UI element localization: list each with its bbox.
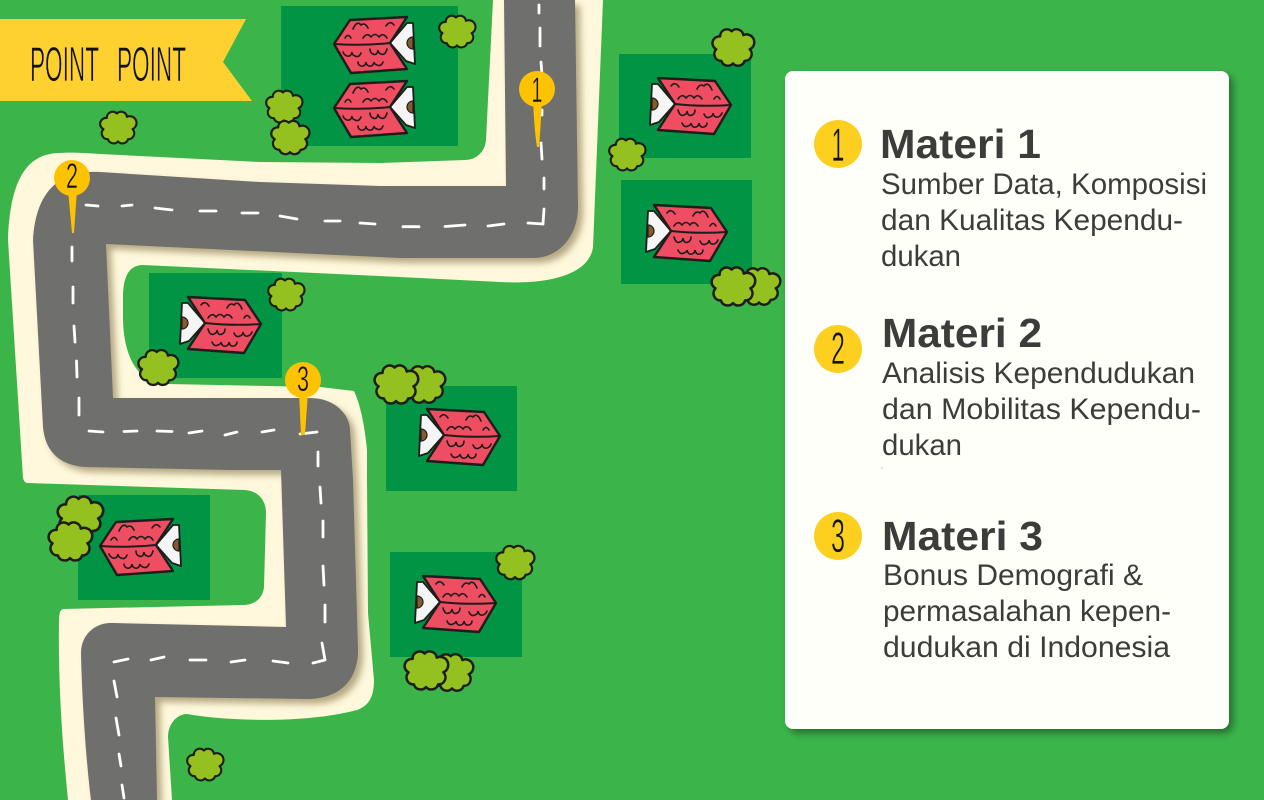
item 2: dan Mobilitas Kependu- <box>882 393 1201 426</box>
road verge: cream shoulder <box>8 0 603 800</box>
item 3 <box>814 509 1171 664</box>
bush <box>405 651 448 689</box>
title ribbon: POINT <box>30 38 99 92</box>
bush <box>58 497 103 536</box>
map pin 1 <box>519 71 555 147</box>
bush <box>403 366 445 403</box>
road centre dashes <box>72 5 544 798</box>
house 1 <box>334 17 415 73</box>
bush <box>712 29 754 66</box>
bush <box>738 268 780 305</box>
house 8 <box>100 519 181 575</box>
item 2: Analisis Kependudukan <box>882 357 1195 390</box>
bush <box>496 546 534 579</box>
item 3: Materi 3 <box>882 513 1043 559</box>
house 6 <box>419 409 500 465</box>
bush <box>431 654 473 691</box>
title ribbon: POINT <box>117 38 186 92</box>
item 2 <box>814 310 1201 468</box>
map pin 2: 2 <box>66 157 78 196</box>
item 3: 3 <box>831 509 845 562</box>
panel: materi list <box>785 71 1233 733</box>
house 7 <box>415 576 496 632</box>
item 3: Bonus Demografi & <box>883 559 1143 592</box>
house 4 <box>646 205 727 261</box>
bush <box>712 267 755 305</box>
title ribbon <box>0 19 252 101</box>
house 5 <box>180 297 261 353</box>
bush <box>49 522 92 560</box>
bush <box>609 139 646 170</box>
item 2: Materi 2 <box>882 310 1042 356</box>
bush <box>439 16 476 47</box>
house plots <box>78 6 752 657</box>
house 2 <box>334 81 415 137</box>
item 1: dan Kualitas Kependu- <box>881 204 1183 237</box>
item 1: Sumber Data, Komposisi <box>881 168 1207 201</box>
item 1 <box>814 118 1207 273</box>
road shadow <box>38 5 583 800</box>
bush <box>187 749 224 780</box>
map pin 3 <box>285 360 321 435</box>
house 3 <box>650 78 731 134</box>
map pin 3: 3 <box>297 360 309 399</box>
bush <box>100 112 137 143</box>
bush <box>375 365 418 403</box>
map pin 2 <box>54 157 90 233</box>
item 2: dukan <box>882 429 962 462</box>
winding road <box>33 0 578 800</box>
item 2: 2 <box>831 323 845 374</box>
item 1: 1 <box>832 118 844 171</box>
item 3: dudukan di Indonesia <box>883 631 1170 664</box>
bush <box>138 350 178 385</box>
item 3: permasalahan kepen- <box>883 595 1171 628</box>
item 1: Materi 1 <box>880 121 1041 167</box>
item 1: dukan <box>881 240 961 273</box>
bush <box>271 121 309 154</box>
map pin 1: 1 <box>532 71 542 110</box>
bush <box>268 279 305 310</box>
bush <box>266 91 303 122</box>
